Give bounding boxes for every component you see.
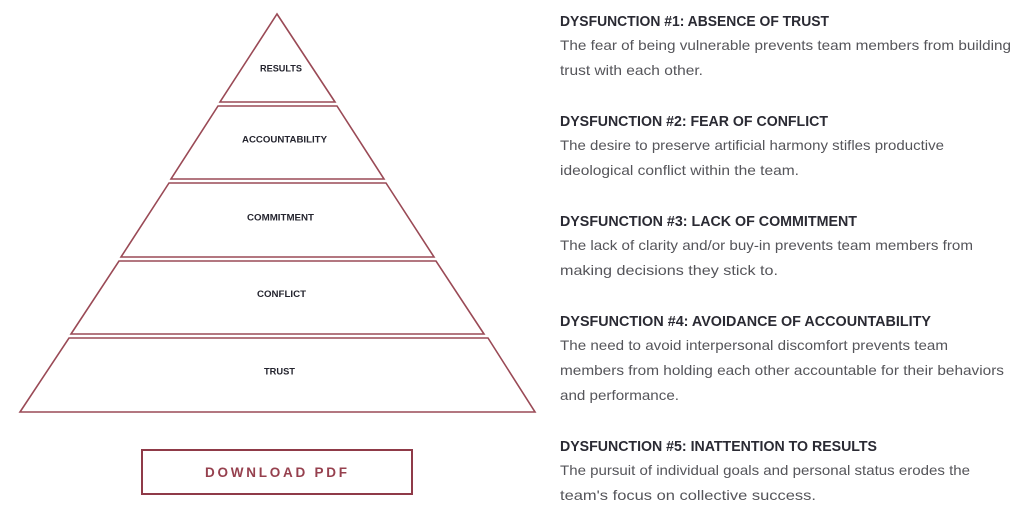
pyramid tier: trust [20, 338, 535, 412]
dysfunction 4 text block: The need to avoid interpersonal discomfort prevents team [560, 337, 948, 353]
download button: DOWNLOAD PDF [205, 465, 347, 480]
pyramid tier: commitment [121, 183, 434, 257]
dysfunction 3 text block: The lack of clarity and/or buy-in prevents team members from [560, 237, 973, 253]
dysfunction 4 text block: members from holding each other accountable for their behaviors [560, 362, 1004, 378]
dysfunction 5 text block: DYSFUNCTION #5: INATTENTION TO RESULTS [560, 439, 877, 455]
dysfunction 3 text block: making decisions they stick to. [560, 262, 778, 278]
pyramid tier: accountability [171, 106, 384, 179]
dysfunction 5 text block: team's focus on collective success. [560, 487, 816, 503]
dysfunction 1 text block: DYSFUNCTION #1: ABSENCE OF TRUST [560, 14, 829, 30]
dysfunction 2 text block: The desire to preserve artificial harmony stifles productive [560, 137, 944, 153]
dysfunction 5 text block: The pursuit of individual goals and personal status erodes the [560, 462, 970, 478]
dysfunction 4 text block: and performance. [560, 387, 679, 403]
download button [142, 450, 412, 494]
pyramid tier: conflict: CONFLICT [257, 289, 306, 300]
dysfunction 2 text block: ideological conflict within the team. [560, 162, 799, 178]
pyramid diagram [20, 14, 535, 412]
pyramid tier: accountability: ACCOUNTABILITY [242, 134, 328, 146]
pyramid tier: results [220, 14, 335, 102]
dysfunction 4 text block: DYSFUNCTION #4: AVOIDANCE OF ACCOUNTABILITY [560, 314, 931, 330]
dysfunction 5 text block [560, 439, 970, 503]
dysfunction 3 text block: DYSFUNCTION #3: LACK OF COMMITMENT [560, 214, 857, 230]
pyramid tier: commitment: COMMITMENT [247, 212, 314, 224]
dysfunction 1 text block: The fear of being vulnerable prevents team members from building [560, 37, 1011, 53]
dysfunction 3 text block [560, 214, 973, 278]
pyramid tier: conflict [71, 261, 484, 334]
dysfunction 1 text block: trust with each other. [560, 62, 703, 78]
pyramid tier: results: RESULTS [260, 64, 302, 74]
dysfunction 2 text block: DYSFUNCTION #2: FEAR OF CONFLICT [560, 114, 828, 130]
pyramid tier: trust: TRUST [264, 366, 295, 378]
dysfunction 4 text block [560, 314, 1004, 403]
dysfunction 2 text block [560, 114, 944, 178]
dysfunction 1 text block [560, 14, 1011, 78]
